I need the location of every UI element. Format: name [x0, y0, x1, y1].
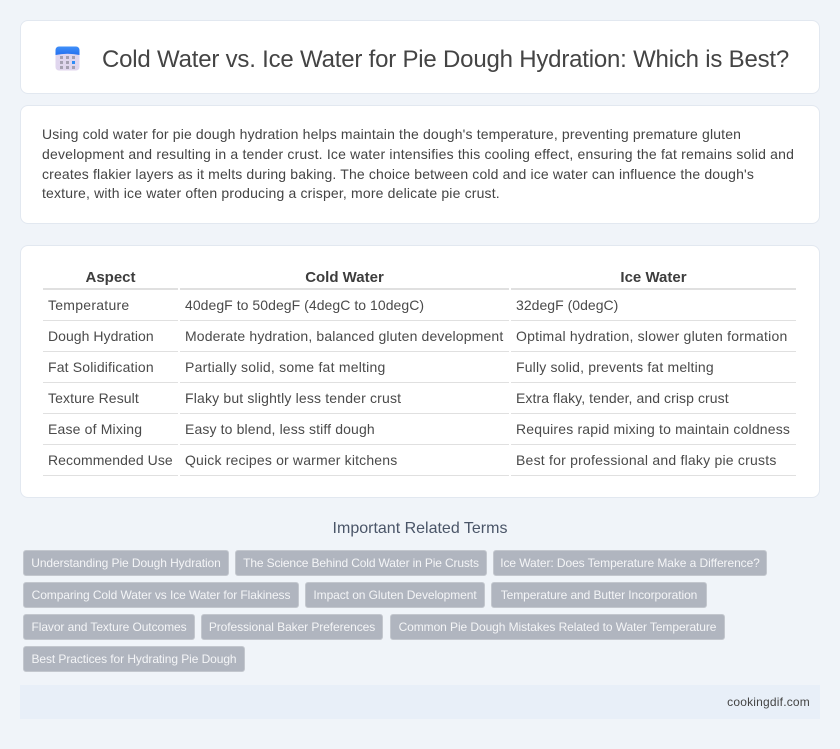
tag	[23, 582, 299, 608]
row: dough hydration: Dough Hydration	[48, 328, 154, 344]
tag	[390, 614, 725, 640]
comparison table panel: 32degF (0degC)	[516, 297, 618, 313]
intro text panel: creates flakier layers as it melts during baking. The choice between cold and ice water can influence the dough's	[42, 166, 754, 182]
row: fat solidification: Fat Solidification	[48, 359, 154, 375]
related terms tags	[23, 550, 767, 672]
source credit: cookingdif.com	[727, 695, 810, 709]
comparison table panel: Flaky but slightly less tender crust	[185, 390, 401, 406]
comparison table panel: Easy to blend, less stiff dough	[185, 421, 375, 437]
tag: Flavor and Texture Outcomes	[31, 620, 187, 634]
comparison table panel: Ice Water	[620, 269, 687, 286]
tag: Professional Baker Preferences	[209, 620, 375, 634]
intro text panel	[20, 105, 820, 224]
comparison table panel: Best for professional and flaky pie crusts	[516, 452, 777, 468]
tag: Temperature and Butter Incorporation	[501, 588, 697, 602]
tag: Comparing Cold Water vs Ice Water for Flakiness	[32, 588, 290, 602]
tag	[23, 614, 195, 640]
comparison table panel: Quick recipes or warmer kitchens	[185, 452, 397, 468]
row: ease of mixing: Ease of Mixing	[48, 421, 142, 437]
comparison table panel: Moderate hydration, balanced gluten development	[185, 328, 503, 344]
related terms heading: Important Related Terms	[333, 520, 507, 537]
tag	[201, 614, 383, 640]
title: Cold Water vs. Ice Water for Pie Dough Hydration: Which is Best?	[102, 46, 789, 73]
comparison table panel: Extra flaky, tender, and crisp crust	[516, 390, 729, 406]
comparison table panel: Cold Water	[305, 269, 384, 286]
tag	[491, 582, 707, 608]
comparison table panel	[20, 245, 820, 498]
icon: calendar	[56, 46, 80, 70]
intro text panel: texture, with ice water often producing a crisper, more delicate pie crust.	[42, 185, 500, 201]
comparison table panel: Requires rapid mixing to maintain coldness	[516, 421, 790, 437]
footer bar	[20, 685, 820, 719]
tag: Best Practices for Hydrating Pie Dough	[31, 652, 237, 666]
tag: Ice Water: Does Temperature Make a Difference?	[500, 556, 760, 570]
tag: Impact on Gluten Development	[313, 588, 477, 602]
row: recommended use: Recommended Use	[48, 452, 173, 468]
row: temperature: Temperature	[48, 297, 129, 313]
comparison table panel: Optimal hydration, slower gluten formation	[516, 328, 787, 344]
tag	[493, 550, 767, 576]
tag: The Science Behind Cold Water in Pie Crusts	[243, 556, 479, 570]
comparison table panel: Fully solid, prevents fat melting	[516, 359, 714, 375]
tag	[305, 582, 485, 608]
comparison table panel: Partially solid, some fat melting	[185, 359, 386, 375]
comparison table panel: 40degF to 50degF (4degC to 10degC)	[185, 297, 424, 313]
table header: Aspect	[85, 269, 136, 286]
tag	[235, 550, 487, 576]
tag	[23, 550, 229, 576]
tag: Understanding Pie Dough Hydration	[31, 556, 221, 570]
tag	[23, 646, 245, 672]
header panel	[20, 20, 820, 94]
tag: Common Pie Dough Mistakes Related to Water Temperature	[399, 620, 716, 634]
row: texture result: Texture Result	[48, 390, 139, 406]
intro text panel: Using cold water for pie dough hydration helps maintain the dough's temperature, preventing premature gluten	[42, 126, 741, 142]
intro text panel: development and resulting in a tender crust. Ice water intensifies this cooling effect, ensuring the fat remains solid and	[42, 146, 794, 162]
